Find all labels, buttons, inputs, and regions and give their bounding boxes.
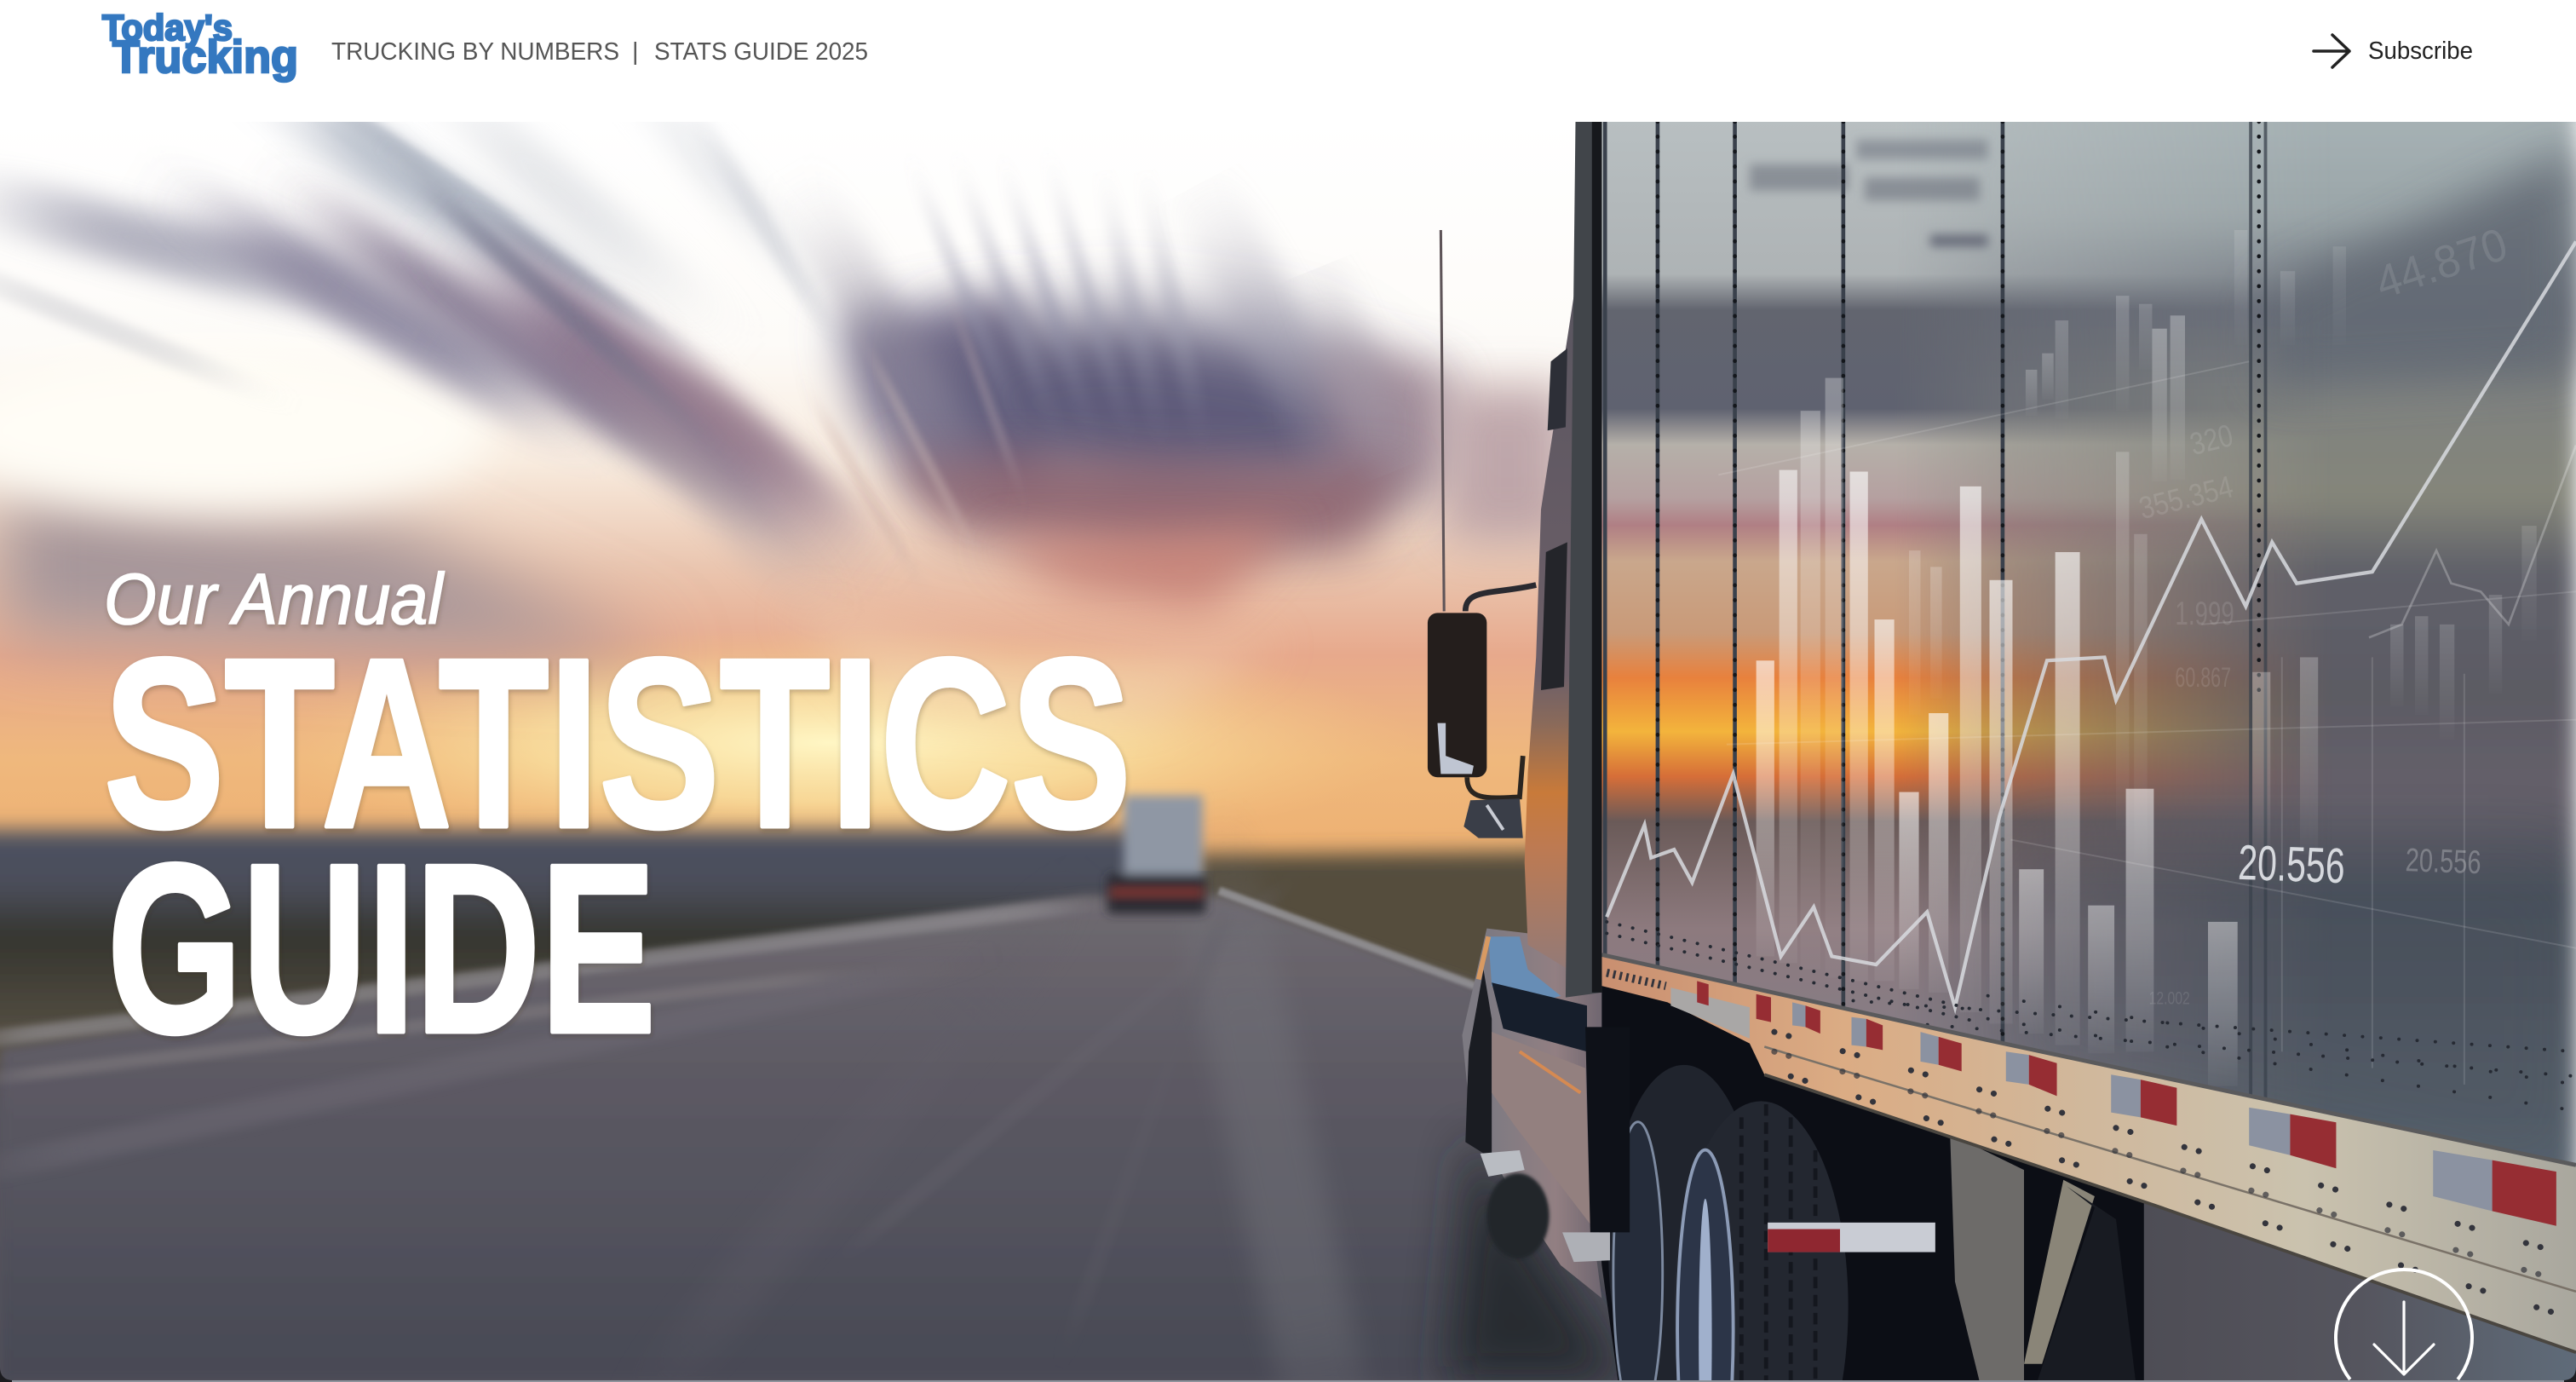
right-of-frame mauve band [1446,386,1569,542]
antenna [1440,230,1444,611]
title line: GUIDE: GUIDE [107,814,656,1083]
rear trailer skirt [2144,1196,2576,1382]
lower step [1562,1232,1610,1262]
roadside barrier [1219,890,1475,986]
red reflective tape blocks [1697,981,2556,1226]
lower shade [2021,855,2576,1183]
black fairing gap [1585,1027,1630,1232]
main mirror [1428,613,1486,777]
road [0,890,1643,1382]
main line chart [1607,241,2576,1007]
dark step recess [1492,982,1587,1051]
tagline [331,38,868,66]
logo: Today's Trucking: Trucking [112,32,298,83]
ground base [0,871,1643,1382]
sun glow [372,646,1310,828]
side mirror assembly [1428,585,1536,838]
icon: right arrow [2314,35,2349,67]
suspension strut [2024,1180,2095,1364]
mirror arm [1465,585,1536,611]
faint chart values: 12.002 [2149,988,2190,1008]
road motion streaks [0,893,1366,1382]
faint chart values: 355.354 [2136,469,2236,526]
trailer rivet rows [1607,922,2576,1111]
reflected sunset [1601,122,2576,1173]
left haze [0,490,674,657]
peach light band [826,624,1240,720]
tractor cab [1525,296,1574,973]
reflected cloud dashes [1750,140,1988,246]
faint chart values: 1.999 [2175,596,2234,632]
grey reflective tape blocks [1792,1002,2493,1211]
tagline: TRUCKING BY NUMBERS [331,38,619,66]
title line: STATISTICS: STATISTICS [104,608,1131,878]
secondary faint line chart [2369,446,2576,637]
undercarriage [1577,970,2576,1382]
financial chart overlay [1607,218,2576,1086]
subscribe link [2314,35,2473,67]
trailer side panel [1577,99,2576,1183]
tractor lower body [1462,929,1630,1299]
step [1481,1150,1525,1177]
front tire [1486,1173,1550,1258]
shadow under truck [1446,1134,1626,1382]
cab window [1541,542,1567,690]
bar chart [1757,230,2537,1086]
reflected dark cloud, upper right [2267,148,2576,386]
tagline: STATS GUIDE 2025 [654,38,868,66]
header bar [102,8,2473,83]
logo: Today's Trucking [102,8,298,83]
faint chart values: 60.867 [2175,661,2231,693]
faint chart values [2136,218,2514,1008]
sky [0,97,1643,871]
faint chart values: 44.870 [2370,218,2514,308]
mudflap bar [1768,1223,1935,1252]
front tandem tire [1608,1065,1759,1382]
rear tandem tire [1674,1101,1849,1382]
distant truck [1107,795,1206,913]
spot mirror [1463,798,1523,838]
headline [104,559,1131,1083]
silver bar and dark rivets on left end [1670,988,1750,1039]
bright left glow [0,348,493,513]
suspension panel [1950,1134,2024,1382]
rail rivets [1774,1032,2576,1320]
chart value 20.556: 20.556 [2237,836,2346,894]
trailer posts [1605,122,2265,1103]
kicker: Our Annual: Our Annual [104,559,445,639]
black front strip [1465,970,1492,1159]
scroll-down icon [2336,1270,2472,1379]
wheels [1608,1065,1935,1382]
faint chart values: 20.556 [2405,842,2481,881]
front post of trailer [1566,122,1601,998]
motion-blur clouds [0,97,1569,723]
tagline: | [632,38,639,66]
side skirt reflection [1492,1032,1590,1224]
trailer frame rail with conspicuity tape [1601,954,2576,1352]
faint chart values: 320 [2187,417,2236,462]
logo: Today's Trucking: Today's [102,8,233,49]
page base behind rounded hero corners [0,1355,2576,1382]
chrome blue fender [1488,936,1561,1005]
subscribe label: Subscribe [2368,37,2473,65]
faint grid lines [1718,361,2576,1085]
ground: dark treeline and grass [0,830,1577,1076]
